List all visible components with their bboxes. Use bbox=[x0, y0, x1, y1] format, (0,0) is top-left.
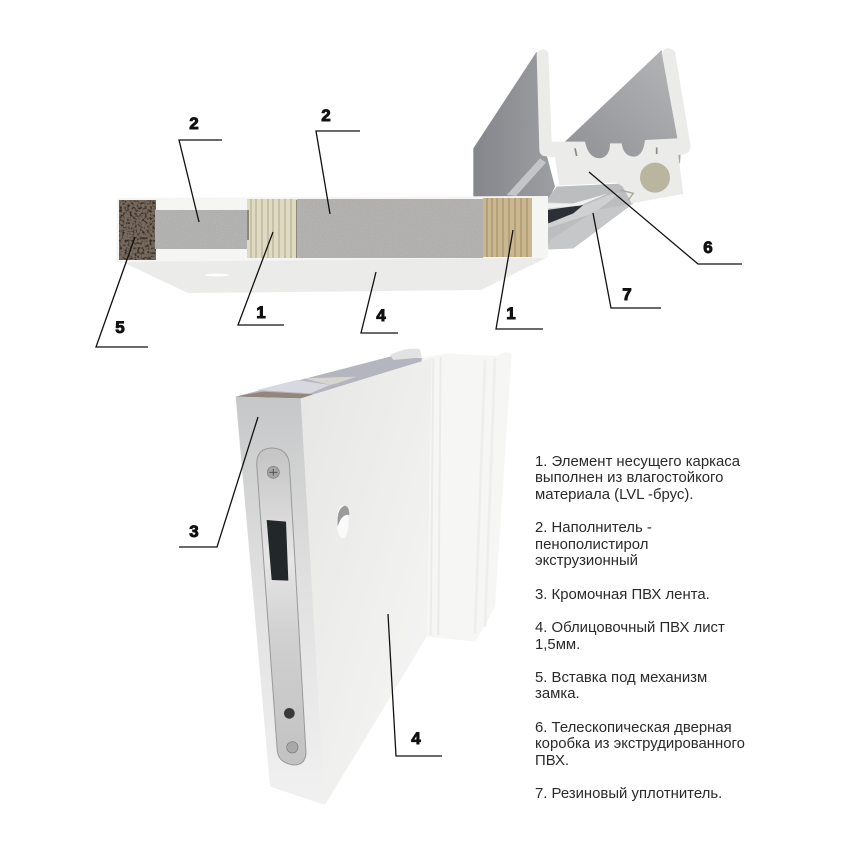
latch opening bbox=[267, 520, 288, 581]
callout 2 left bbox=[179, 114, 222, 222]
door top edge bbox=[236, 357, 432, 398]
legend item 1: материала (LVL -брус). bbox=[535, 487, 693, 503]
legend item 5 bbox=[535, 670, 707, 702]
left frame wall bbox=[473, 52, 555, 203]
profile round hole bbox=[640, 163, 670, 193]
panel underside bbox=[118, 257, 548, 293]
legend item 5: замка. bbox=[535, 686, 580, 702]
legend item 2: 2. Наполнитель - bbox=[535, 520, 652, 536]
callout 1 left bbox=[238, 232, 284, 325]
door narrow edge bbox=[236, 397, 325, 805]
legend item 1: 1. Элемент несущего каркаса bbox=[535, 454, 740, 470]
legend text block bbox=[535, 454, 745, 802]
callout 2 right bbox=[316, 106, 360, 214]
legend item 4 bbox=[535, 620, 725, 653]
callout 1 right: 1 bbox=[506, 304, 516, 323]
legend item 1 bbox=[535, 454, 740, 503]
lock keyhole bbox=[284, 708, 295, 719]
legend item 6: ПВХ. bbox=[535, 753, 569, 769]
callout 6 bbox=[589, 172, 742, 264]
section face bbox=[116, 196, 548, 262]
callout 4 top bbox=[361, 272, 398, 333]
callout 7 bbox=[593, 213, 661, 308]
callout 4 bottom: 4 bbox=[411, 729, 421, 748]
central filler bbox=[297, 199, 483, 258]
legend item 1: выполнен из влагостойкого bbox=[535, 470, 723, 486]
bottom screw bbox=[287, 742, 298, 753]
callout 1 left: 1 bbox=[256, 303, 266, 322]
legend item 4: 4. Облицовочный ПВХ лист bbox=[535, 620, 725, 636]
legend item 6: коробка из экструдированного bbox=[535, 736, 745, 752]
callout 2 left: 2 bbox=[189, 114, 199, 133]
callout 6: 6 bbox=[703, 238, 713, 257]
legend item 6: 6. Телескопическая дверная bbox=[535, 720, 732, 736]
callout 3 bbox=[179, 417, 258, 547]
legend item 2: пенополистирол bbox=[535, 537, 648, 553]
wood beam bbox=[247, 199, 297, 258]
callout 4 bottom bbox=[388, 614, 442, 756]
door large face bbox=[301, 358, 432, 805]
callout 3: 3 bbox=[189, 522, 199, 541]
second wood beam bbox=[483, 198, 532, 257]
edge filler bbox=[155, 210, 248, 249]
legend item 3: 3. Кромочная ПВХ лента. bbox=[535, 587, 710, 603]
handle hole bbox=[337, 505, 349, 538]
rubber seal bbox=[545, 193, 620, 228]
lock plate bbox=[257, 448, 306, 765]
legend item 6 bbox=[535, 720, 745, 769]
callout 1 right bbox=[496, 230, 543, 329]
bottom door bbox=[236, 349, 512, 805]
white extruded profile bbox=[537, 48, 691, 203]
legend item 2: экструзионный bbox=[535, 553, 638, 569]
top screw bbox=[267, 466, 279, 478]
lock insert bbox=[119, 200, 156, 260]
callout 4 top: 4 bbox=[376, 306, 386, 325]
door profile side bbox=[422, 352, 512, 642]
callout 2 right: 2 bbox=[321, 106, 331, 125]
callout 7: 7 bbox=[622, 285, 632, 304]
callout 5 bbox=[96, 237, 148, 347]
top door section bbox=[116, 196, 548, 293]
frame underside bbox=[547, 183, 633, 249]
legend item 7: 7. Резиновый уплотнитель. bbox=[535, 786, 722, 802]
right frame wall bbox=[565, 50, 682, 163]
callout 5: 5 bbox=[115, 318, 125, 337]
door frame profile bbox=[473, 48, 691, 249]
legend item 5: 5. Вставка под механизм bbox=[535, 670, 707, 686]
legend item 2 bbox=[535, 520, 652, 569]
legend item 4: 1,5мм. bbox=[535, 637, 580, 653]
